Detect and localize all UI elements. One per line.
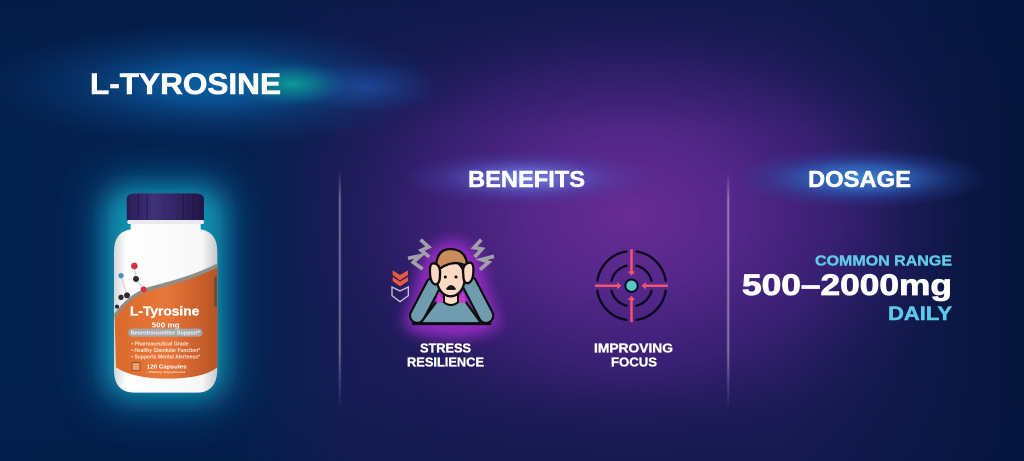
panel: product bottle bbox=[95, 175, 235, 410]
label: improving focus: IMPROVING bbox=[594, 340, 673, 356]
icon: supplement bottle: • Healthy Glandular Function* bbox=[131, 348, 201, 354]
icon glow bbox=[403, 240, 500, 338]
heading: benefits: BENEFITS bbox=[468, 166, 585, 192]
heading: dosage: DOSAGE bbox=[808, 166, 911, 192]
icon: supplement bottle: 500 mg bbox=[152, 322, 180, 329]
icon: stressed person bbox=[392, 240, 494, 324]
icon: supplement bottle bbox=[114, 193, 217, 393]
icon: target bbox=[595, 249, 668, 322]
title: L-TYROSINE bbox=[90, 68, 281, 101]
label: improving focus: FOCUS bbox=[611, 354, 657, 370]
icon: supplement bottle: 120 Capsules bbox=[147, 364, 187, 370]
benefit: stress resilience bbox=[392, 240, 500, 370]
title glow bbox=[0, 22, 445, 146]
dosage: common range: COMMON RANGE bbox=[815, 253, 952, 270]
dosage: amount: 500–2000mg bbox=[742, 269, 952, 302]
benefit: improving focus bbox=[594, 249, 673, 370]
heading glow bbox=[732, 148, 988, 208]
icon: supplement bottle: Neurotransmitter Support* bbox=[131, 331, 201, 337]
divider left bbox=[339, 170, 341, 410]
label: stress resilience: STRESS bbox=[420, 340, 471, 356]
panel: benefits bbox=[392, 150, 673, 370]
divider right bbox=[727, 172, 729, 410]
icon: supplement bottle: • Supports Mental Alertness* bbox=[131, 355, 201, 361]
panel: dosage bbox=[732, 148, 988, 325]
icon: supplement bottle: • Pharmaceutical Grade bbox=[131, 341, 189, 347]
icon: supplement bottle: • Dietary Supplement bbox=[147, 370, 185, 374]
label: stress resilience: RESILIENCE bbox=[407, 354, 484, 370]
bottle glow bbox=[95, 175, 235, 410]
dosage: frequency: DAILY bbox=[888, 303, 952, 325]
icon: supplement bottle: L-Tyrosine bbox=[130, 304, 199, 318]
heading glow bbox=[402, 150, 652, 206]
